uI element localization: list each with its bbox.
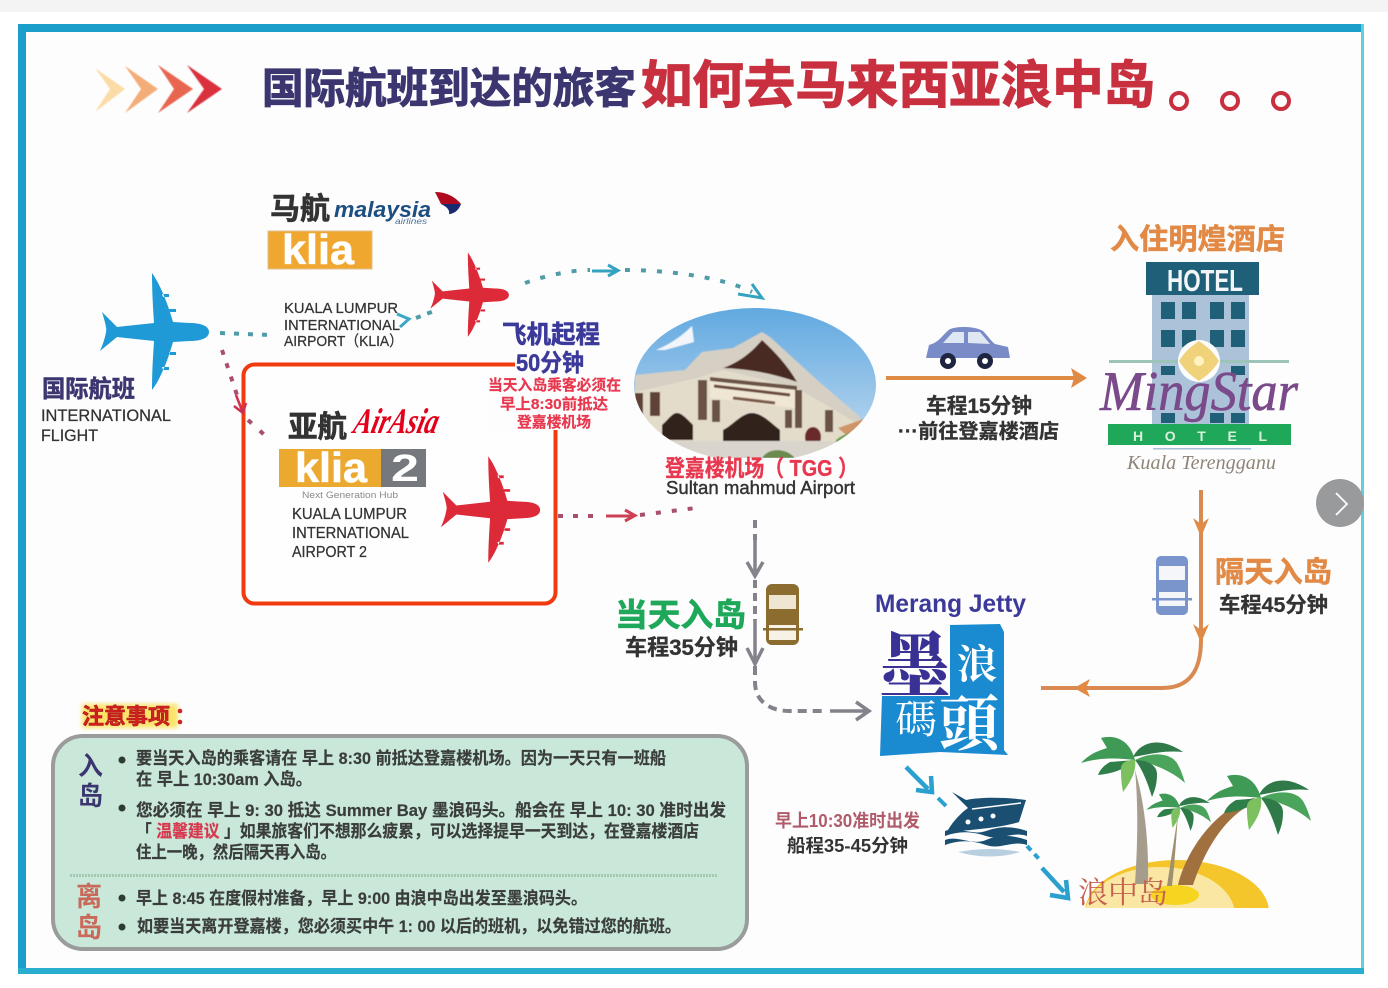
flight time callout [486, 318, 625, 431]
logo: merang jetty: 碼 [895, 688, 937, 745]
arrival bullets: 要当天入岛的乘客请在 早上 8:30 前抵达登嘉楼机场。因为一天只有一班船 [136, 748, 666, 768]
logo: klia: klia [282, 226, 355, 273]
drive to hotel label: 车程15分钟 [926, 395, 1032, 418]
departure bullets: 如要当天离开登嘉楼，您必须买中午 1: 00 以后的班机，以免错过您的航班。 [137, 916, 681, 936]
drive to hotel label: ···前往登嘉楼酒店 [898, 420, 1059, 443]
KLIA airport name [284, 300, 403, 350]
departure label: 岛 [76, 913, 102, 943]
logo: mingstar hotel: HOTEL [1133, 428, 1267, 444]
teal dashed route to KLIA [220, 311, 434, 335]
logo: klia [268, 226, 372, 273]
arrow: airport to hotel [886, 368, 1087, 388]
logo: merang jetty: 墨 [880, 609, 952, 713]
logo: mingstar hotel: MingStar [1099, 361, 1298, 423]
KLIA2 airport name: KUALA LUMPUR [292, 506, 407, 523]
icon: blue car top [1152, 556, 1192, 615]
arrival bullets: 您必须在 早上 9: 30 抵达 Summer Bay 墨浪码头。船会在 早上 10: 30 准时出发 [136, 800, 726, 820]
KLIA airport name: INTERNATIONAL [284, 317, 400, 334]
KLIA2 airport name: AIRPORT 2 [292, 544, 367, 561]
international flight label: 国际航班 [42, 376, 135, 403]
arrow: boat to island [1027, 846, 1068, 898]
KLIA airport name: AIRPORT（KLIA） [284, 333, 403, 350]
panel: notes [53, 736, 747, 949]
arrow: jetty to boat [906, 767, 946, 806]
panel: airasia klia2 box [244, 364, 556, 604]
boat schedule label: 船程35-45分钟 [787, 836, 908, 856]
icon: brown car top [763, 584, 803, 645]
hotel heading: 入住明煌酒店 [1110, 223, 1285, 256]
logo: malaysia airlines: airlines [395, 217, 427, 226]
logo: airasia [288, 401, 444, 444]
arrival label [78, 751, 103, 811]
next-day label [1215, 556, 1332, 617]
arrival label: 岛 [78, 781, 103, 811]
departure label [76, 882, 102, 943]
logo: malaysia airlines: 马航 [270, 193, 330, 226]
red dashed route to airport [558, 508, 696, 521]
next-day label: 车程45分钟 [1219, 594, 1328, 617]
teal dashed route to airport [525, 265, 762, 298]
icon: red plane klia2 [441, 456, 540, 563]
arrival bullets: 在 早上 10:30am 入岛。 [136, 769, 312, 789]
icon: blue plane [100, 273, 209, 390]
flight time callout: 当天入岛乘客必须在 [488, 376, 621, 394]
departure bullets [118, 888, 681, 936]
international flight label: INTERNATIONAL [41, 407, 171, 425]
icon: island with palms: 浪中岛 [1078, 868, 1168, 912]
departure bullets: 早上 8:45 在度假村准备，早上 9:00 由浪中岛出发至墨浪码头。 [136, 888, 587, 908]
logo: malaysia airlines [270, 192, 461, 226]
boat schedule label [775, 810, 920, 856]
icon: boat [945, 792, 1027, 856]
title: 如何去马来西亚浪中岛 [641, 57, 1155, 114]
drive to hotel label [898, 395, 1059, 443]
logo: klia2 [279, 444, 426, 500]
logo: mingstar hotel [1099, 262, 1298, 474]
jetty heading: Merang Jetty [875, 590, 1026, 618]
logo: airasia: 亚航 [288, 411, 347, 444]
international flight label [41, 376, 171, 445]
notes heading: 注意事项 [82, 704, 170, 729]
flight time callout: 50分钟 [516, 350, 584, 377]
logo: mingstar hotel: Kuala Terengganu [1126, 452, 1276, 474]
arrow: airport to jetty [747, 520, 869, 720]
icon: red plane klia [430, 253, 509, 337]
departure label: 离 [76, 882, 102, 912]
flight time callout: 飞机起程 [502, 321, 600, 349]
logo: airasia: AirAsia [349, 401, 444, 441]
boat schedule label: 早上10:30准时出发 [775, 810, 920, 831]
logo: klia2: 2 [391, 448, 419, 490]
same-day label: 当天入岛 [615, 597, 746, 633]
logo: klia2: Next Generation Hub [302, 490, 398, 500]
airport photo [630, 305, 880, 465]
logo: malaysia airlines: malaysia [334, 197, 431, 222]
flight time callout: 登嘉楼机场 [517, 413, 591, 431]
logo: merang jetty: 浪 [957, 633, 997, 690]
flight time callout: 早上8:30前抵达 [500, 395, 608, 413]
logo: klia2: klia [295, 444, 368, 491]
airport name: Sultan mahmud Airport [666, 478, 855, 498]
KLIA airport name: KUALA LUMPUR [284, 300, 398, 317]
button: next [1316, 479, 1364, 527]
next-day label: 隔天入岛 [1215, 556, 1332, 589]
logo: mingstar hotel: HOTEL [1167, 263, 1243, 298]
arrival label: 入 [78, 751, 103, 781]
arrow: hotel to jetty [1041, 490, 1209, 697]
icon: island with palms [1079, 736, 1311, 908]
same-day label: 车程35分钟 [625, 635, 738, 660]
same-day label [615, 597, 746, 660]
arrival bullets: 「 温馨建议 」如果旅客们不想那么疲累，可以选择提早一天到达，在登嘉楼酒店 [136, 821, 699, 841]
logo: merang jetty: 頭 [939, 677, 1002, 763]
airport name [664, 455, 860, 498]
KLIA2 airport name [292, 506, 409, 561]
KLIA2 airport name: INTERNATIONAL [292, 525, 409, 542]
title: 国际航班到达的旅客 [262, 65, 636, 112]
icon: blue car side [926, 327, 1010, 369]
arrival bullets [118, 748, 726, 862]
airport name: 登嘉楼机场（ TGG ） [665, 455, 858, 481]
title [262, 57, 1289, 114]
red dashed route to klia2 [222, 350, 270, 440]
logo: merang jetty [880, 609, 1008, 763]
arrival bullets: 住上一晚，然后隔天再入岛。 [136, 842, 336, 862]
icon: title chevrons [95, 65, 222, 113]
international flight label: FLIGHT [41, 427, 98, 445]
